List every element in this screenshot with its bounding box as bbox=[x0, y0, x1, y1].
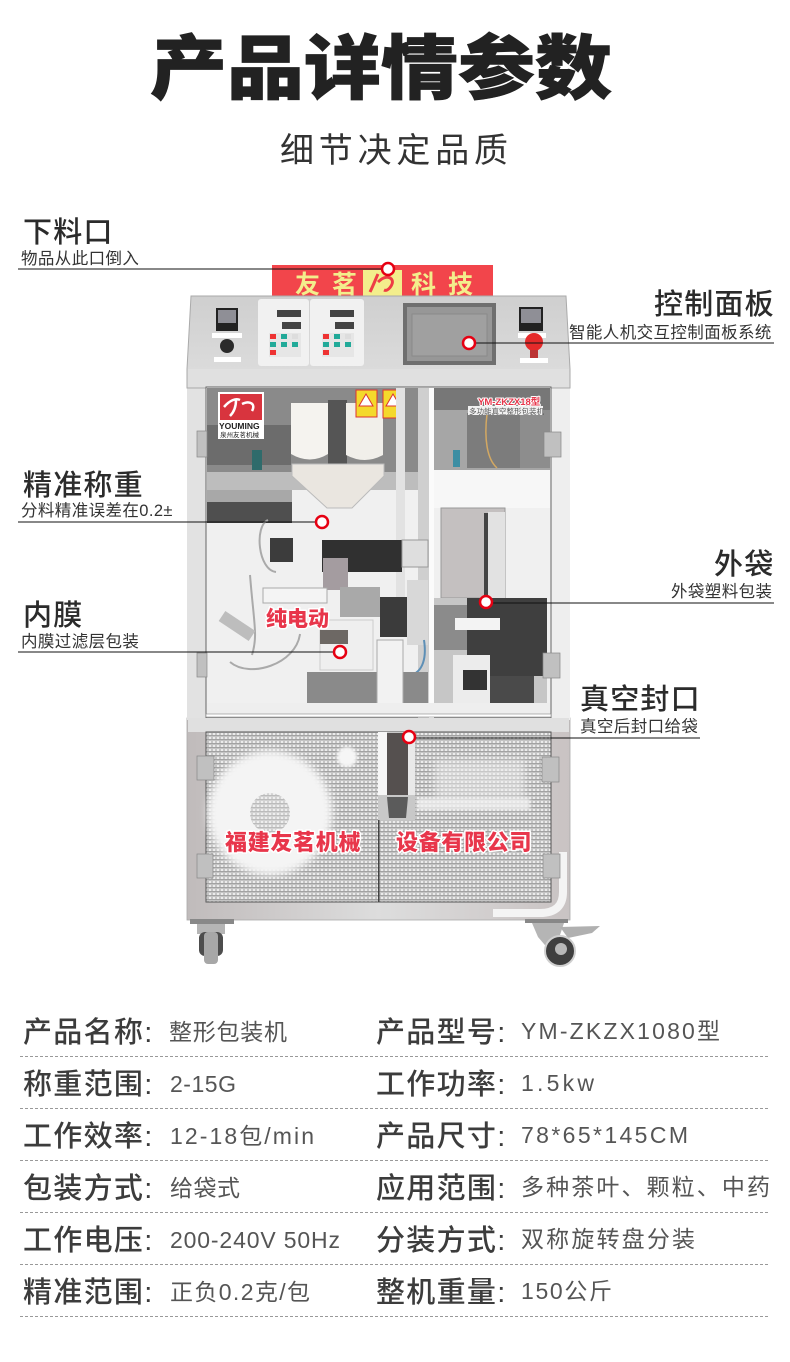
row 5 bbox=[23, 1224, 695, 1257]
row 1: 整形包装机 bbox=[169, 1019, 287, 1045]
cabinet middle sides bbox=[187, 385, 570, 720]
door handle bbox=[493, 852, 563, 913]
center opening bbox=[378, 732, 415, 820]
model label: 多功能真空整形包装机 bbox=[469, 406, 544, 416]
row 1: YM-ZKZX1080型 bbox=[521, 1018, 720, 1044]
row 2: 称重范围: bbox=[23, 1068, 154, 1101]
row 4: 给袋式 bbox=[170, 1175, 240, 1201]
row 5: 工作电压: bbox=[23, 1224, 154, 1257]
brand banner: 友茗 bbox=[295, 271, 369, 299]
cabinet lower frame bbox=[187, 718, 570, 920]
row 2: 2-15G bbox=[170, 1071, 236, 1097]
row 6: 整机重量: bbox=[376, 1276, 507, 1309]
row 4: 多种茶叶、颗粒、中药 bbox=[521, 1174, 770, 1200]
right caster bbox=[525, 919, 600, 966]
electric label: 纯电动 bbox=[266, 607, 329, 631]
row 5: 200-240V 50Hz bbox=[170, 1227, 340, 1253]
hoppers bbox=[291, 403, 328, 460]
upper window bbox=[206, 387, 551, 718]
left thermostat bbox=[212, 308, 242, 362]
subtitle: 细节决定品质 bbox=[280, 132, 513, 170]
callout: 内膜 bbox=[18, 599, 346, 658]
door text left: 福建友茗机械 bbox=[225, 830, 361, 855]
upper control cabinet bbox=[187, 296, 570, 388]
row 2 bbox=[23, 1068, 594, 1101]
wiring bbox=[230, 520, 300, 669]
callout: 内膜: 内膜 bbox=[23, 599, 83, 632]
row 6 bbox=[23, 1276, 612, 1309]
row 1: 产品型号: bbox=[376, 1016, 507, 1049]
row 4 bbox=[23, 1172, 770, 1205]
callout: 下料口: 下料口 bbox=[23, 216, 114, 249]
logo card bbox=[218, 392, 264, 439]
model label bbox=[468, 396, 544, 416]
brand banner bbox=[272, 265, 493, 299]
machine illustration bbox=[187, 265, 600, 966]
row 3 bbox=[23, 1120, 688, 1153]
right thermostat and stop button bbox=[518, 307, 548, 363]
logo card: YOUMING bbox=[219, 421, 260, 431]
callout: 外袋: 外袋 bbox=[714, 548, 774, 581]
row 3: 产品尺寸: bbox=[376, 1120, 507, 1153]
row 1 bbox=[23, 1016, 720, 1049]
door hinges bbox=[197, 431, 561, 878]
callout: 下料口 bbox=[18, 216, 394, 275]
controller panel 2 bbox=[310, 299, 364, 366]
callout: 控制面板 bbox=[463, 288, 775, 349]
brand banner: 科技 bbox=[411, 271, 485, 299]
callout: 内膜: 内膜过滤层包装 bbox=[21, 632, 139, 651]
callout: 精准称重: 精准称重 bbox=[23, 469, 144, 502]
controller panel 1 bbox=[258, 299, 309, 366]
model label: YM-ZKZX18型 bbox=[478, 396, 541, 408]
lower doors bbox=[206, 732, 563, 913]
row 4: 应用范围: bbox=[376, 1172, 507, 1205]
row 3: 78*65*145CM bbox=[521, 1122, 688, 1148]
callout: 精准称重: 分料精准误差在0.2± bbox=[21, 501, 173, 520]
middle beam bbox=[188, 718, 569, 732]
rear compartment bbox=[434, 598, 547, 710]
logo card: 泉州友茗机械 bbox=[220, 430, 260, 439]
stainless chute plate bbox=[441, 508, 505, 598]
door text right: 设备有限公司 bbox=[396, 830, 532, 855]
row 2: 工作功率: bbox=[376, 1068, 507, 1101]
callout: 真空封口: 真空封口 bbox=[580, 683, 701, 716]
title: 产品详情参数 bbox=[150, 29, 612, 108]
row 5: 分装方式: bbox=[376, 1224, 507, 1257]
callout: 外袋 bbox=[480, 548, 774, 608]
callout: 外袋: 外袋塑料包装 bbox=[671, 582, 772, 601]
row 1: 产品名称: bbox=[23, 1016, 154, 1049]
row 6: 150公斤 bbox=[521, 1278, 612, 1304]
row 5: 双称旋转盘分装 bbox=[521, 1226, 695, 1252]
row 2: 1.5kw bbox=[521, 1070, 594, 1096]
left caster bbox=[190, 919, 234, 964]
callout: 下料口: 物品从此口倒入 bbox=[21, 249, 139, 268]
central vertical posts bbox=[396, 388, 405, 603]
callout: 控制面板: 智能人机交互控制面板系统 bbox=[569, 323, 772, 342]
upper left compartment bbox=[207, 388, 429, 472]
callout: 控制面板: 控制面板 bbox=[654, 288, 775, 321]
row 6: 正负0.2克/包 bbox=[170, 1279, 310, 1305]
touch screen bbox=[403, 303, 496, 365]
row 3: 12-18包/min bbox=[170, 1123, 314, 1149]
forming mechanism bbox=[322, 540, 402, 572]
upper right compartment bbox=[434, 388, 550, 470]
warning labels bbox=[356, 390, 404, 418]
row 6: 精准范围: bbox=[23, 1276, 154, 1309]
callout: 真空封口: 真空后封口给袋 bbox=[580, 717, 698, 736]
row 4: 包装方式: bbox=[23, 1172, 154, 1205]
callout: 精准称重 bbox=[18, 469, 328, 528]
callout: 真空封口 bbox=[403, 683, 701, 743]
specification table bbox=[20, 1016, 770, 1316]
row 3: 工作效率: bbox=[23, 1120, 154, 1153]
